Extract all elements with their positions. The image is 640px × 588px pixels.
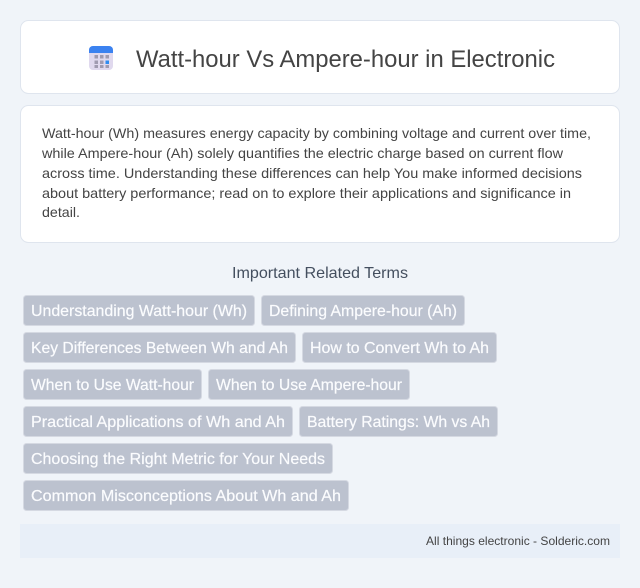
heading: related terms: Important Related Terms: [232, 265, 408, 282]
tag: How to Convert: How to Convert Wh to Ah: [310, 340, 489, 357]
tag: Defining Ampere-hour: Defining Ampere-hour (Ah): [269, 303, 457, 320]
tag: When to Use Watt-hour: [24, 370, 202, 400]
tag: When to Use Ampere-hour: [208, 370, 410, 400]
tag: Choosing the Right Metric: Choosing the Right Metric for Your Needs: [31, 451, 325, 468]
panel: intro text: Watt-hour (Wh) measures energy capacity by combining voltage and current over time,: [42, 125, 591, 141]
tag: Battery Ratings: Battery Ratings: Wh vs Ah: [307, 414, 490, 431]
tag: Key Differences: Key Differences Between Wh and Ah: [31, 340, 288, 357]
title: Watt-hour Vs Ampere-hour in Electronic: [136, 46, 555, 73]
tag: Understanding Watt-hour: [24, 296, 254, 326]
tag: Defining Ampere-hour: [262, 296, 464, 326]
tag: Battery Ratings: [300, 406, 498, 436]
tag: When to Use Watt-hour: When to Use Watt-hour: [31, 377, 195, 394]
footer: [20, 524, 620, 558]
tag: Key Differences: [24, 332, 296, 362]
panel: intro text: detail.: [42, 204, 80, 220]
panel: intro text: about battery performance; read on to explore their applications and significance in: [42, 185, 571, 201]
footer: All things electronic - Solderic.com: [426, 534, 610, 548]
panel: header: [20, 20, 620, 94]
tag: How to Convert: [302, 332, 496, 362]
tag: Common Misconceptions: Common Misconceptions About Wh and Ah: [31, 488, 341, 505]
tag: Understanding Watt-hour: Understanding Watt-hour (Wh): [31, 303, 247, 320]
panel: intro text: while Ampere-hour (Ah) solely quantifies the electric charge based on current flow: [41, 145, 564, 161]
tag: Common Misconceptions: [24, 480, 348, 510]
panel: intro text: [20, 106, 620, 242]
icon: calendar: [89, 46, 113, 70]
tag: Choosing the Right Metric: [24, 444, 332, 474]
tag: When to Use Ampere-hour: When to Use Ampere-hour: [216, 377, 403, 394]
panel: intro text: across time. Understanding these differences can help You make informed decisions: [42, 165, 582, 181]
tag: Practical Applications: [24, 406, 292, 436]
tag: Practical Applications: Practical Applications of Wh and Ah: [31, 414, 285, 431]
